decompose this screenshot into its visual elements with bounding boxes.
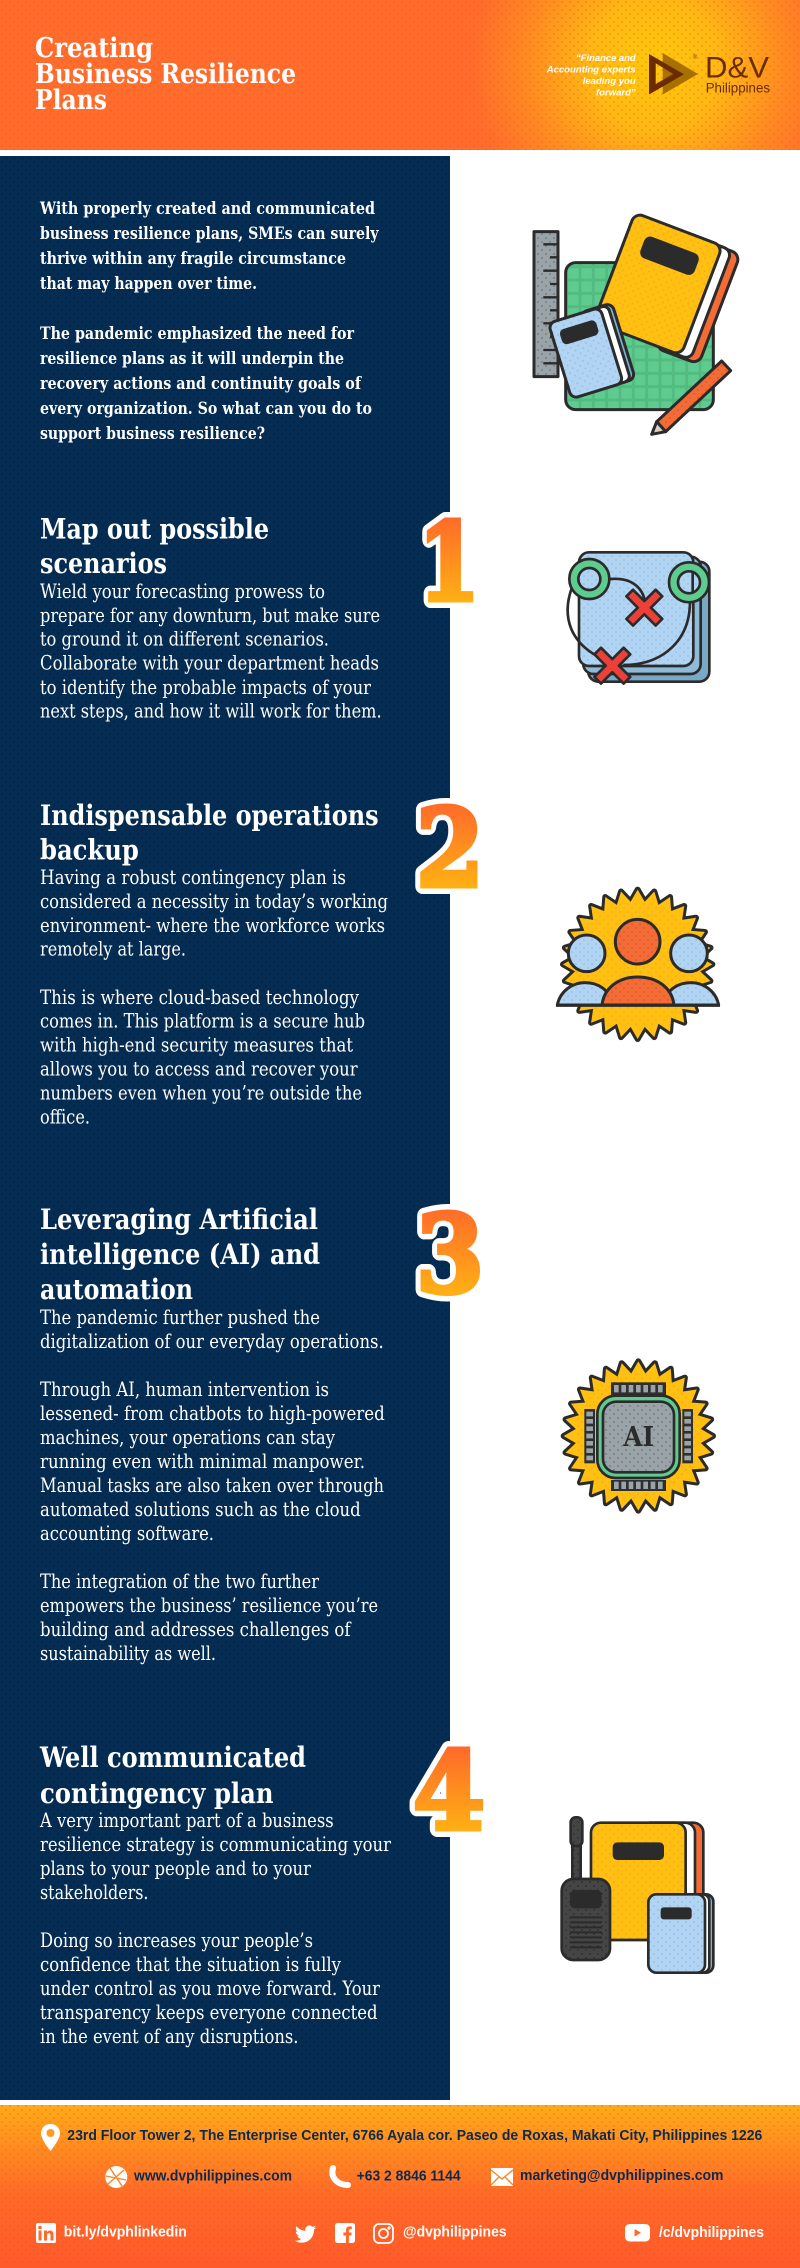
heading: [40, 799, 379, 866]
navy content panel: [0, 156, 450, 2100]
tagline: “Finance and: [576, 53, 636, 64]
icon: twitter: [295, 2225, 316, 2243]
heading: Indispensable operations: [40, 799, 379, 832]
body text: building and addresses challenges of: [40, 1618, 352, 1641]
phone number: +63 2 8846 1144: [357, 2169, 461, 2185]
icon: facebook: [335, 2223, 355, 2243]
D&V Philippines logo: Philippines: [706, 79, 770, 95]
intro text: resilience plans as it will underpin the: [40, 349, 344, 369]
body text: stakeholders.: [40, 1881, 148, 1904]
icon: linkedin: [36, 2223, 56, 2243]
section 2: operations backup: [40, 799, 388, 1128]
body text: accounting software.: [40, 1522, 214, 1545]
number 1: 1: [418, 500, 480, 626]
icon: instagram: [374, 2224, 393, 2243]
icon: phone: [332, 2168, 348, 2185]
intro text: every organization. So what can you do to: [40, 399, 372, 419]
body text: comes in. This platform is a secure hub: [40, 1010, 365, 1033]
body text: A very important part of a business: [39, 1809, 334, 1832]
body text: with high-end security measures that: [40, 1034, 353, 1057]
number 1: 1: [418, 500, 480, 626]
number 2: 2: [416, 786, 484, 912]
heading: backup: [40, 833, 139, 866]
body text: transparency keeps everyone connected: [40, 2001, 378, 2024]
address: 23rd Floor Tower 2, The Enterprise Center, 6766 Ayala cor. Paseo de Roxas, Makati City, Philippines 1226: [67, 2128, 762, 2144]
body text: Collaborate with your department heads: [40, 652, 379, 674]
heading: [39, 1741, 306, 1810]
number 3: 3: [416, 1192, 484, 1318]
icon: mail: [491, 2168, 513, 2186]
tagline: forward”: [596, 87, 636, 98]
icon: notebooks, ruler and pencil: [534, 213, 741, 434]
tagline: leading you: [583, 76, 636, 87]
tagline: Accounting experts: [546, 64, 636, 75]
heading: Map out possible: [40, 512, 269, 546]
body text: remotely at large.: [40, 938, 186, 961]
heading: intelligence (AI) and: [40, 1238, 320, 1271]
intro text: business resilience plans, SMEs can surely: [40, 224, 380, 244]
intro text: support business resilience?: [40, 424, 265, 444]
body text: This is where cloud-based technology: [40, 986, 359, 1009]
intro text: thrive within any fragile circumstance: [40, 249, 346, 269]
body text: lessened- from chatbots to high-powered: [40, 1402, 385, 1425]
icon: scenario map: [568, 552, 709, 695]
D&V Philippines logo: ®: [693, 54, 698, 61]
email: marketing@dvphilippines.com: [520, 2168, 724, 2184]
section 3: AI and automation: [40, 1203, 385, 1665]
intro text: With properly created and communicated: [39, 199, 375, 219]
body text: considered a necessity in today’s working: [40, 890, 388, 913]
body text: [40, 1306, 385, 1665]
body text: automated solutions such as the cloud: [40, 1498, 361, 1521]
body text: to identify the probable impacts of your: [40, 676, 372, 699]
body text: [39, 1809, 392, 2048]
body text: Wield your forecasting prowess to: [40, 580, 325, 603]
social handle: @dvphilippines: [403, 2225, 507, 2241]
heading: contingency plan: [40, 1777, 274, 1810]
body text: machines, your operations can stay: [40, 1426, 335, 1449]
number 4: 4: [413, 1729, 485, 1855]
body text: Through AI, human intervention is: [40, 1378, 329, 1401]
icon: location pin: [41, 2124, 60, 2151]
number 2: 2: [416, 786, 484, 912]
section 1: map out scenarios: [40, 512, 382, 723]
body text: Having a robust contingency plan is: [40, 866, 346, 889]
icon: walkie-talkie and notebooks: [562, 1817, 713, 1973]
body text: The integration of the two further: [40, 1570, 320, 1593]
intro text: The pandemic emphasized the need for: [40, 324, 355, 344]
D&V Philippines logo: [649, 51, 770, 95]
body text: environment- where the workforce works: [40, 914, 385, 937]
body text: plans to your people and to your: [40, 1857, 312, 1880]
intro text: that may happen over time.: [40, 274, 257, 294]
tagline: [546, 53, 636, 98]
body text: sustainability as well.: [40, 1642, 216, 1665]
body text: office.: [40, 1106, 90, 1128]
body text: Manual tasks are also taken over through: [40, 1474, 384, 1497]
title: [35, 32, 296, 116]
body text: under control as you move forward. Your: [40, 1977, 381, 2000]
footer banner: [0, 2105, 800, 2268]
body text: numbers even when you’re outside the: [40, 1082, 362, 1105]
heading: Leveraging Artificial: [40, 1203, 318, 1236]
body text: empowers the business’ resilience you’re: [40, 1594, 378, 1617]
number 4: 4: [413, 1729, 485, 1855]
icon: youtube: [625, 2224, 650, 2242]
icon: people on starburst: [552, 878, 724, 1050]
body text: [40, 866, 388, 1128]
title: Business Resilience: [35, 58, 296, 90]
title: Creating: [35, 32, 153, 64]
body text: confidence that the situation is fully: [40, 1953, 341, 1976]
section 4: contingency plan: [39, 1741, 392, 2048]
heading: automation: [40, 1273, 193, 1306]
heading: scenarios: [40, 547, 167, 580]
number 3: 3: [416, 1192, 484, 1318]
body text: Doing so increases your people’s: [40, 1929, 313, 1952]
body text: running even with minimal manpower.: [40, 1450, 365, 1473]
body text: [40, 580, 382, 723]
AI label: AI: [622, 1421, 654, 1453]
header banner: [0, 0, 800, 150]
heading: Well communicated: [39, 1741, 306, 1774]
body text: digitalization of our everyday operations.: [40, 1330, 384, 1353]
body text: prepare for any downturn, but make sure: [40, 604, 380, 627]
intro text: recovery actions and continuity goals of: [40, 374, 362, 394]
heading: [40, 1203, 320, 1306]
intro text: [39, 199, 380, 444]
body text: next steps, and how it will work for them.: [40, 700, 382, 723]
heading: [40, 512, 269, 580]
body text: in the event of any disruptions.: [40, 2025, 298, 2048]
body text: to ground it on different scenarios.: [40, 628, 329, 651]
body text: The pandemic further pushed the: [40, 1306, 320, 1329]
D&V Philippines logo: D&V: [705, 51, 769, 84]
youtube channel: /c/dvphilippines: [659, 2225, 764, 2241]
website: www.dvphilippines.com: [133, 2169, 292, 2185]
title: Plans: [35, 84, 107, 116]
icon: globe: [105, 2166, 127, 2188]
icon: AI chip on starburst: [552, 1350, 724, 1522]
linkedin link: bit.ly/dvphlinkedin: [64, 2225, 187, 2241]
body text: allows you to access and recover your: [40, 1057, 358, 1080]
body text: resilience strategy is communicating your: [40, 1833, 392, 1856]
